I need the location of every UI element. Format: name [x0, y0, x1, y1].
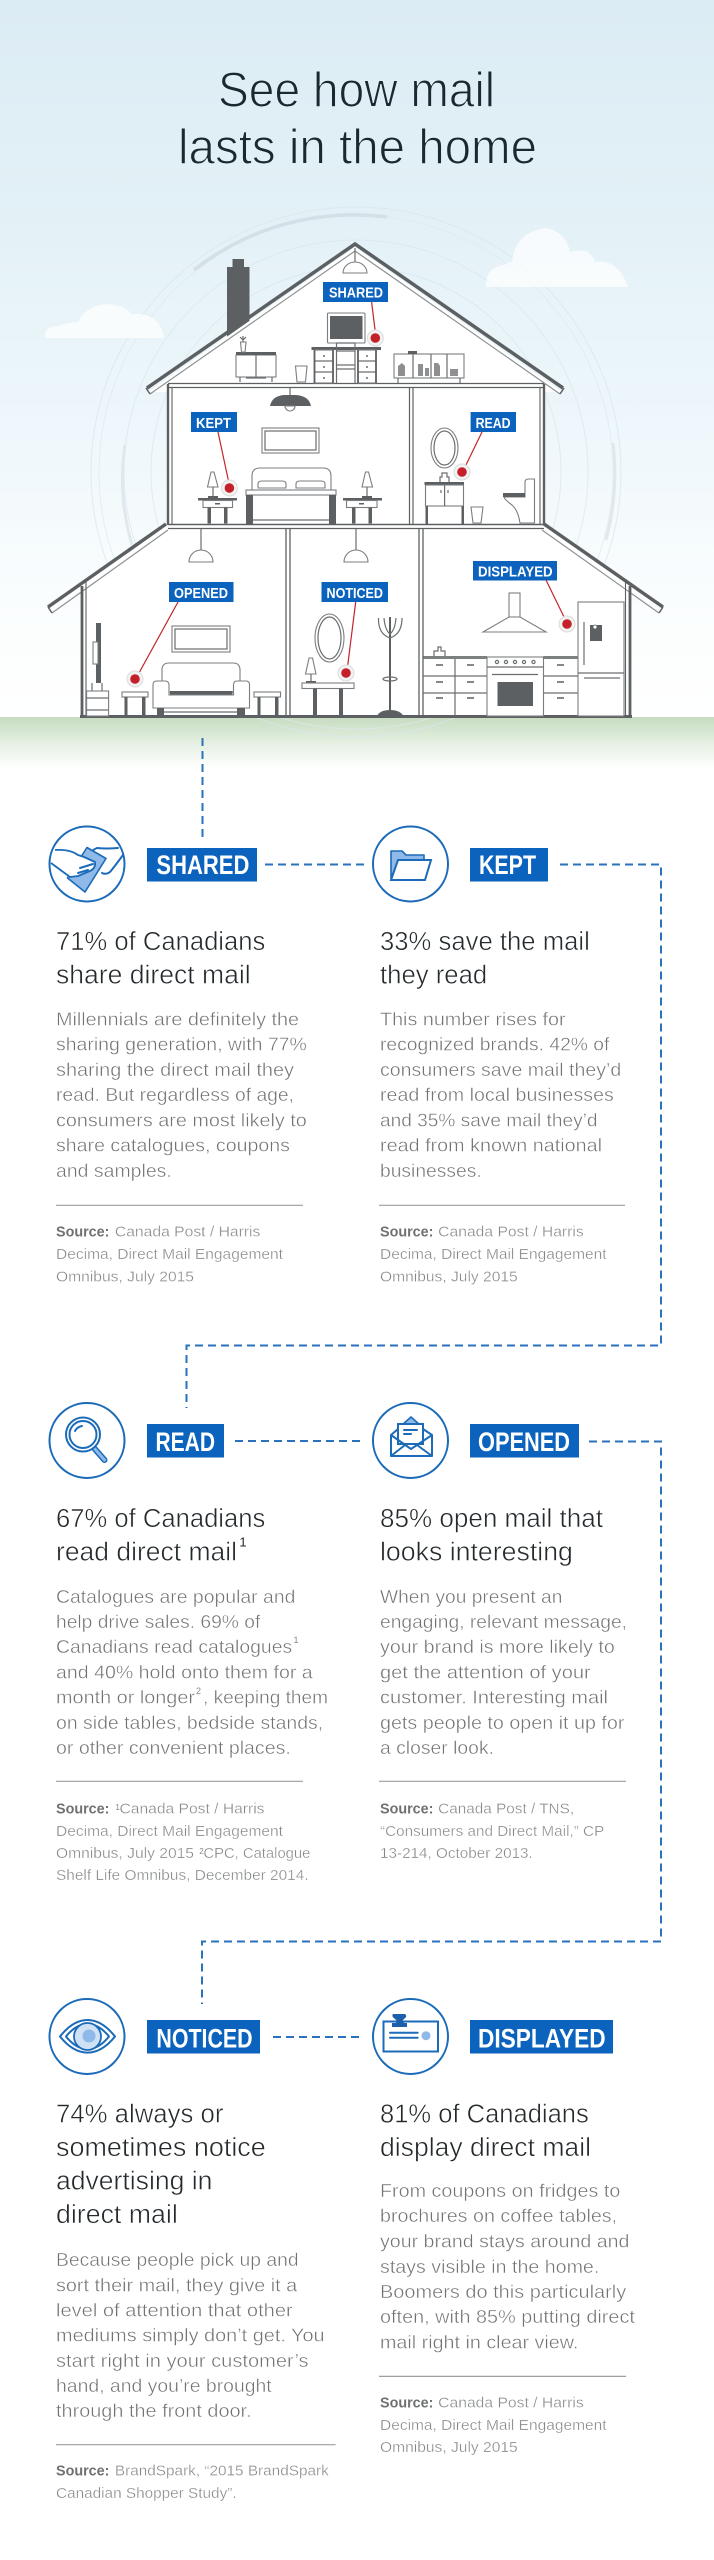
body text: Millennials are definitely the: [56, 1008, 299, 1030]
body text: gets people to open it up for: [380, 1712, 624, 1733]
source: Omnibus, July 2015: [380, 1268, 518, 1285]
attic: shelf: [394, 351, 464, 383]
body text: engaging, relevant message,: [380, 1611, 627, 1632]
panel: displayed: [373, 1999, 635, 2456]
body text: customer. Interesting mail: [380, 1687, 608, 1708]
icon: handing over mail: [50, 826, 124, 902]
tag: kept: [191, 412, 237, 432]
bedroom: right nightstand with lamp: [343, 472, 382, 524]
bedroom: picture frame: [262, 428, 319, 453]
tag: opened: OPENED: [174, 586, 228, 602]
marker: read: [454, 432, 482, 480]
heading: 1: [239, 1535, 247, 1550]
body text: stays visible in the home.: [380, 2256, 599, 2277]
panel: noticed: [50, 1999, 336, 2502]
icon: card with magnet: [373, 1999, 448, 2074]
heading: [380, 1505, 603, 1566]
bedroom: left nightstand with lamp: [198, 472, 237, 524]
icon: magnifier: [50, 1403, 124, 1478]
cloud left: [45, 304, 164, 338]
panel: opened: [373, 1403, 627, 1862]
attic: waste bin: [296, 366, 307, 382]
panel: shared: [50, 826, 307, 1285]
heading: share direct mail: [56, 962, 251, 990]
marker: noticed: [338, 602, 356, 681]
body text: through the front door.: [56, 2400, 252, 2421]
bathroom: sink: [424, 473, 464, 524]
heading: direct mail: [56, 2201, 178, 2229]
source: Source:: [380, 1800, 433, 1817]
source: [380, 1224, 607, 1285]
heading: advertising in: [56, 2167, 212, 2195]
source: Decima, Direct Mail Engagement: [380, 2417, 607, 2434]
body text: sharing the direct mail they: [56, 1059, 295, 1080]
body text: This number rises for: [380, 1008, 566, 1030]
body text: consumers are most likely to: [56, 1110, 307, 1130]
hallway: mirror: [315, 614, 344, 662]
body text: From coupons on fridges to: [380, 2180, 620, 2201]
body text: mail right in clear view.: [380, 2331, 578, 2352]
body text: and samples.: [56, 1160, 172, 1181]
icon: open envelope: [373, 1403, 448, 1478]
source: Canada Post / Harris: [438, 1224, 584, 1241]
source: Canada Post / Harris: [115, 1224, 260, 1241]
heading: 85% open mail that: [380, 1505, 603, 1533]
bathroom: toilet: [503, 479, 534, 523]
living room: tv and cabinet: [87, 623, 109, 716]
body text: , keeping them: [203, 1687, 328, 1708]
body text: on side tables, bedside stands,: [56, 1712, 323, 1733]
connector: kept to read: [186, 864, 661, 1408]
body text: a closer look.: [380, 1737, 494, 1758]
body text: sort their mail, they give it a: [56, 2274, 298, 2295]
source: Shelf Life Omnibus, December 2014.: [56, 1867, 309, 1884]
body text: 1: [294, 1635, 299, 1645]
body text: month or longer: [56, 1687, 195, 1708]
heading: 67% of Canadians: [56, 1505, 265, 1533]
heading: 81% of Canadians: [380, 2101, 589, 2129]
body text: Because people pick up and: [56, 2249, 299, 2270]
heading: they read: [380, 962, 487, 990]
attic: desk with monitor: [312, 313, 381, 383]
background: sky: [0, 0, 714, 720]
marker: displayed: [546, 580, 575, 632]
tag heading: displayed: DISPLAYED: [478, 2024, 606, 2054]
body text: Canadians read catalogues: [56, 1636, 292, 1657]
source: Canadian Shopper Study”.: [56, 2485, 237, 2502]
body text: and 40% hold onto them for a: [56, 1661, 313, 1682]
source: [380, 1800, 604, 1862]
body text: [56, 1008, 307, 1181]
heading: looks interesting: [380, 1538, 573, 1566]
body text: your brand is more likely to: [380, 1636, 615, 1657]
tag: shared: SHARED: [329, 286, 383, 302]
heading: [380, 2101, 591, 2162]
kitchen: stove: [487, 657, 544, 716]
hallway: coat rack: [377, 617, 404, 716]
body text: recognized brands. 42% of: [380, 1034, 610, 1055]
body text: your brand stays around and: [380, 2230, 629, 2252]
title: [178, 64, 537, 174]
body text: and 35% save mail they’d: [380, 1110, 598, 1130]
body text: or other convenient places.: [56, 1737, 291, 1758]
kitchen: right counter: [544, 656, 578, 698]
body text: [56, 2249, 325, 2421]
body text: get the attention of your: [380, 1661, 591, 1682]
source: [56, 1224, 284, 1285]
heading: [56, 1505, 265, 1566]
source: Source:: [56, 1224, 109, 1241]
bathroom: bin: [471, 507, 483, 523]
upper roof: [146, 244, 564, 394]
source: [380, 2395, 607, 2456]
tag heading: read: READ: [156, 1427, 215, 1457]
body text: [380, 1008, 621, 1181]
heading: 71% of Canadians: [56, 928, 265, 956]
heading: 74% always or: [56, 2101, 224, 2129]
background: ground: [0, 717, 714, 768]
body text: businesses.: [380, 1160, 482, 1181]
heading: [56, 928, 265, 990]
body text: Boomers do this particularly: [380, 2281, 627, 2302]
body text: help drive sales. 69% of: [56, 1611, 261, 1632]
body text: When you present an: [380, 1586, 562, 1607]
source: Canada Post / TNS,: [438, 1800, 574, 1817]
tag: noticed: NOTICED: [326, 586, 383, 602]
hallway: table with lamp: [302, 658, 354, 716]
bedroom: pendant lamp: [270, 388, 311, 411]
body text: Catalogues are popular and: [56, 1586, 295, 1607]
body text: 2: [196, 1686, 201, 1696]
icon: folder: [373, 826, 448, 902]
lower roof: [48, 524, 663, 613]
body text: [380, 2180, 635, 2352]
living room: sofa: [153, 663, 250, 716]
decorative dome rings behind house: [91, 207, 621, 737]
source: “Consumers and Direct Mail,” CP: [380, 1823, 604, 1840]
source: Omnibus, July 2015: [56, 1845, 194, 1862]
heading: [380, 928, 590, 990]
source: Decima, Direct Mail Engagement: [56, 1246, 284, 1263]
house: [48, 244, 663, 717]
living room: picture frame: [172, 626, 230, 652]
connector: opened to noticed: [202, 1442, 661, 2004]
connector: read to opened: [235, 1440, 362, 1442]
bathroom: mirror: [431, 428, 458, 468]
source: 1: [115, 1803, 120, 1812]
source: Canada Post / Harris: [438, 2395, 584, 2412]
kitchen: faucet: [434, 647, 445, 656]
kitchen: range hood: [483, 593, 546, 632]
panel: read: [50, 1403, 328, 1884]
body text: often, with 85% putting direct: [380, 2306, 635, 2327]
tag heading: noticed: NOTICED: [156, 2024, 253, 2054]
source: 2: [199, 1847, 204, 1856]
heading: [56, 2101, 266, 2229]
body text: share catalogues, coupons: [56, 1135, 290, 1156]
source: Source:: [56, 2463, 109, 2480]
connector: house to shared: [202, 738, 204, 838]
source: Source:: [380, 1224, 433, 1241]
panel: kept: [373, 826, 625, 1285]
heading: display direct mail: [380, 2134, 591, 2162]
tag heading: opened: OPENED: [478, 1427, 570, 1457]
body text: brochures on coffee tables,: [380, 2205, 617, 2226]
kitchen: left counter: [423, 656, 487, 716]
body text: hand, and you’re brought: [56, 2375, 272, 2396]
marker: kept: [218, 432, 237, 496]
connector: noticed to displayed: [273, 2036, 360, 2038]
source: Decima, Direct Mail Engagement: [380, 1246, 607, 1263]
living room: side tables: [122, 692, 280, 716]
source: Omnibus, July 2015: [56, 1268, 194, 1285]
body text: read from known national: [380, 1135, 602, 1156]
body text: consumers save mail they’d: [380, 1059, 621, 1080]
house silhouette: [50, 247, 662, 716]
source: BrandSpark, “2015 BrandSpark: [115, 2463, 329, 2480]
heading: read direct mail: [56, 1538, 237, 1566]
source: [56, 2463, 329, 2502]
source: Source:: [380, 2395, 433, 2412]
source: Decima, Direct Mail Engagement: [56, 1823, 284, 1840]
icon: eye: [50, 1999, 124, 2074]
heading: sometimes notice: [56, 2134, 266, 2162]
marker: opened: [127, 602, 178, 687]
tag: displayed: DISPLAYED: [478, 565, 553, 581]
marker: shared: [367, 302, 383, 346]
body text: [380, 1586, 627, 1758]
source: Source:: [56, 1800, 109, 1817]
tag: read: READ: [476, 416, 511, 432]
title: lasts in the home: [178, 120, 537, 174]
kitchen: fridge: [578, 602, 624, 716]
chimney: [227, 259, 250, 342]
tag: kept: KEPT: [196, 416, 231, 432]
connector: shared to kept: [265, 864, 367, 866]
body text: [56, 1586, 328, 1758]
living room: pendant lamp: [189, 529, 213, 562]
bedroom: bed: [246, 468, 336, 524]
title: See how mail: [218, 64, 495, 118]
heading: 33% save the mail: [380, 928, 590, 956]
body text: level of attention that other: [56, 2299, 293, 2320]
body text: sharing generation, with 77%: [56, 1034, 307, 1055]
tag heading: shared: SHARED: [156, 850, 249, 880]
source: [56, 1800, 310, 1884]
attic: pendant lamp: [343, 248, 367, 273]
cloud right: [486, 228, 628, 287]
body text: read. But regardless of age,: [56, 1084, 294, 1105]
source: Omnibus, July 2015: [380, 2439, 518, 2456]
body text: mediums simply don’t get. You: [56, 2325, 325, 2346]
source: 13-214, October 2013.: [380, 1845, 533, 1862]
attic: cabinet and plant: [236, 336, 276, 382]
source: CPC, Catalogue: [203, 1845, 310, 1862]
walls and floors: [80, 384, 632, 717]
tag heading: kept: KEPT: [479, 850, 536, 880]
source: Canada Post / Harris: [120, 1800, 264, 1817]
hallway: pendant lamp: [344, 529, 368, 562]
body text: read from local businesses: [380, 1084, 614, 1105]
body text: start right in your customer’s: [56, 2350, 309, 2371]
